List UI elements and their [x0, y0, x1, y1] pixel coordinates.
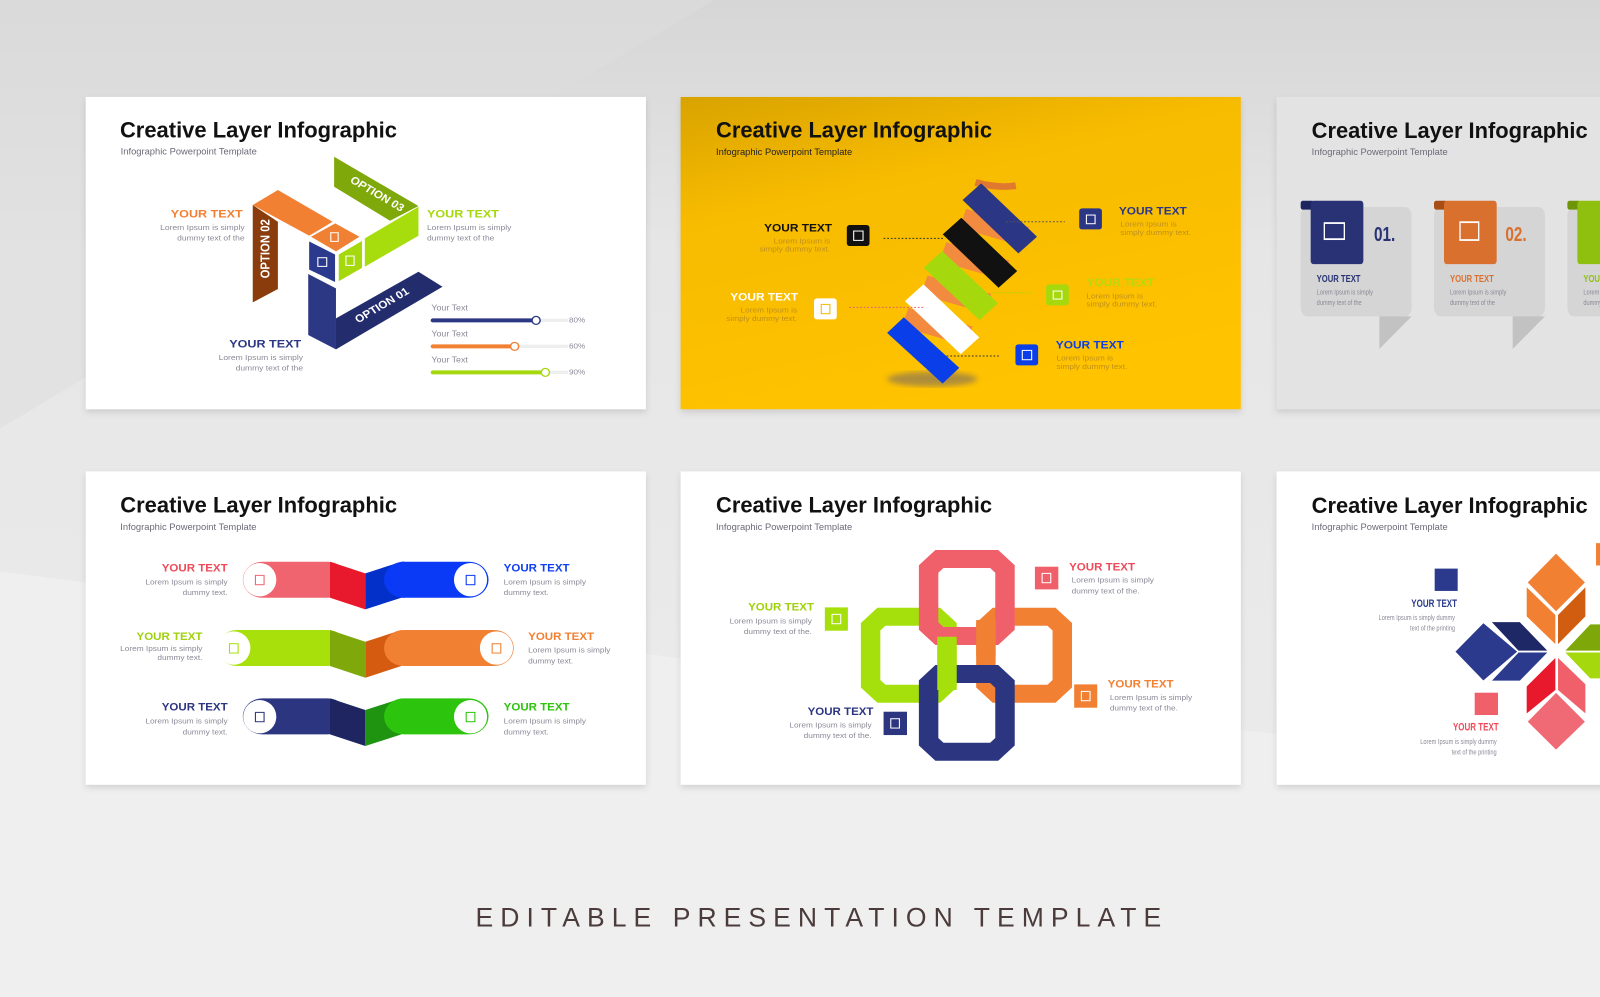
- card 4: folded ribbons: [86, 471, 646, 785]
- progress bars: [431, 303, 585, 377]
- callout 02: [1434, 201, 1545, 349]
- subtitle: Infographic Powerpoint Template: [121, 147, 257, 157]
- callout 02: YOUR TEXT: [1450, 273, 1494, 284]
- title: Creative Layer Infographic: [716, 117, 992, 142]
- subtitle card 3: Infographic Powerpoint Template: [1312, 147, 1448, 157]
- texts: YOUR TEXT: [137, 631, 203, 643]
- title card 3: Creative Layer Infographic: [1312, 119, 1588, 143]
- texts: dummy text.: [504, 588, 549, 597]
- card 2: yellow helix: [681, 97, 1241, 409]
- ribbon row 2: [217, 630, 514, 678]
- callout 01: Lorem Ipsum is simply: [1317, 289, 1374, 297]
- callout 01: [1301, 201, 1412, 349]
- chain rings: [871, 559, 1062, 752]
- texts: YOUR TEXT: [1086, 277, 1154, 289]
- progress bars: Your Text: [431, 355, 469, 365]
- texts: [726, 206, 1191, 371]
- texts: Lorem Ipsum is simply: [145, 578, 228, 586]
- cube flower: [1454, 543, 1600, 751]
- texts: simply dummy text.: [1120, 228, 1191, 237]
- texts: YOUR TEXT: [1108, 679, 1174, 690]
- texts: Lorem Ipsum is simply: [528, 646, 610, 655]
- texts: YOUR TEXT: [764, 223, 832, 235]
- text navy card 6: text of the printing: [1410, 625, 1455, 633]
- text navy card 6: [1379, 569, 1458, 633]
- texts: YOUR TEXT: [504, 702, 570, 714]
- navy column: [308, 274, 336, 349]
- title: Creative Layer Infographic: [120, 117, 397, 142]
- texts: [730, 562, 1192, 740]
- subtitle card 6: Infographic Powerpoint Template: [1312, 522, 1448, 532]
- texts: YOUR TEXT: [1119, 206, 1187, 217]
- olive option 03: [334, 157, 418, 221]
- subtitle: Infographic Powerpoint Template: [716, 522, 852, 532]
- callout 03 (cut): [1567, 201, 1600, 316]
- text: green: YOUR TEXT: [427, 207, 500, 220]
- option 02 column: [253, 205, 278, 302]
- callout 01: dummy text of the: [1317, 300, 1362, 307]
- text navy card 6: YOUR TEXT: [1411, 598, 1457, 610]
- texts: Lorem Ipsum is simply: [1110, 693, 1192, 702]
- texts: [120, 563, 610, 736]
- title card 6: Creative Layer Infographic: [1312, 494, 1588, 518]
- text: navy: dummy text of the: [236, 364, 304, 372]
- texts: dummy text.: [528, 657, 573, 665]
- texts: YOUR TEXT: [162, 563, 228, 575]
- texts: simply dummy text.: [1057, 362, 1127, 371]
- ribbon row 1: [243, 562, 489, 609]
- text: orange: [160, 207, 246, 242]
- texts: YOUR TEXT: [748, 602, 814, 614]
- texts: dummy text.: [157, 653, 202, 662]
- text pink card 6: text of the printing: [1452, 749, 1497, 757]
- icon squares: [825, 567, 1097, 735]
- text: navy: [219, 337, 304, 372]
- olive option 03: OPTION 03: [348, 175, 406, 214]
- texts: Lorem Ipsum is simply: [730, 617, 812, 625]
- progress bars: 60%: [569, 342, 585, 351]
- texts: dummy text.: [504, 728, 549, 736]
- footer caption: EDITABLE PRESENTATION TEMPLATE: [476, 903, 1167, 933]
- texts: dummy text.: [183, 728, 228, 736]
- callout 02: dummy text of the: [1450, 300, 1495, 307]
- cube: [308, 222, 363, 283]
- texts: YOUR TEXT: [162, 702, 228, 714]
- texts: simply dummy text.: [726, 314, 797, 323]
- texts: simply dummy text.: [1086, 300, 1157, 309]
- progress bars: Your Text: [431, 303, 469, 313]
- title: Creative Layer Infographic: [716, 493, 992, 518]
- option 01 slab: [336, 272, 443, 349]
- texts: dummy text of the.: [1110, 704, 1178, 713]
- option 02 column: OPTION 02: [258, 219, 273, 278]
- texts: Lorem Ipsum is: [1120, 220, 1177, 229]
- text pink card 6: YOUR TEXT: [1453, 722, 1499, 734]
- callout 02: 02.: [1505, 223, 1527, 245]
- texts: YOUR TEXT: [730, 292, 798, 304]
- text: green: dummy text of the: [427, 234, 495, 242]
- orange slab: [253, 190, 333, 236]
- texts: YOUR TEXT: [1056, 340, 1124, 351]
- card 3 and card 6: right column: [1277, 97, 1600, 785]
- dotted connectors: [849, 222, 1065, 356]
- title: Creative Layer Infographic: [120, 493, 397, 518]
- texts: YOUR TEXT: [1069, 562, 1135, 574]
- card 1: isometric options: [86, 97, 646, 409]
- cube icons: [318, 233, 354, 266]
- helix ribbon: [895, 182, 1028, 376]
- ribbon row 3: [243, 698, 489, 746]
- callout 02: Lorem Ipsum is simply: [1450, 289, 1507, 297]
- texts: dummy text of the.: [744, 627, 812, 636]
- texts: YOUR TEXT: [504, 563, 570, 575]
- progress bars: 80%: [569, 316, 585, 325]
- text pink card 6: [1420, 693, 1499, 757]
- texts: YOUR TEXT: [808, 706, 874, 718]
- texts: Lorem Ipsum is: [741, 306, 797, 315]
- callout 01: 01.: [1374, 223, 1395, 245]
- subtitle: Infographic Powerpoint Template: [716, 147, 852, 157]
- helix shadow: [887, 372, 977, 386]
- texts: simply dummy text.: [759, 245, 830, 254]
- card 5: chain links: [681, 471, 1241, 785]
- text pink card 6: Lorem Ipsum is simply dummy: [1420, 738, 1497, 746]
- texts: Lorem Ipsum is simply: [504, 578, 586, 586]
- progress bars: Your Text: [431, 329, 469, 339]
- callout 01: YOUR TEXT: [1317, 273, 1361, 284]
- texts: dummy text of the.: [1072, 587, 1140, 595]
- text navy card 6: Lorem Ipsum is simply dummy: [1379, 614, 1456, 622]
- texts: Lorem Ipsum is simply: [1072, 576, 1154, 585]
- text: navy: YOUR TEXT: [229, 337, 302, 350]
- texts: Lorem Ipsum is: [1057, 354, 1113, 363]
- subtitle: Infographic Powerpoint Template: [120, 522, 257, 532]
- texts: Lorem Ipsum is simply: [789, 721, 872, 729]
- texts: dummy text of the.: [804, 731, 872, 740]
- text: orange: dummy text of the: [177, 234, 245, 242]
- text: green: [427, 207, 512, 242]
- texts: Lorem Ipsum is: [1086, 292, 1143, 300]
- text: navy: Lorem Ipsum is simply: [219, 353, 304, 362]
- green slab: [365, 207, 418, 267]
- text: orange: YOUR TEXT: [171, 207, 243, 220]
- icon boxes: [814, 208, 1102, 365]
- option 01 slab: OPTION 01: [353, 286, 412, 326]
- text: orange: Lorem Ipsum is simply: [160, 223, 246, 232]
- texts: Lorem Ipsum is simply: [145, 717, 228, 726]
- texts: Lorem Ipsum is simply: [504, 717, 586, 726]
- texts: Lorem Ipsum is: [774, 237, 830, 245]
- texts: dummy text.: [183, 588, 228, 597]
- texts: YOUR TEXT: [528, 631, 594, 643]
- progress bars: 90%: [569, 368, 585, 377]
- text: green: Lorem Ipsum is simply: [427, 223, 512, 232]
- texts: Lorem Ipsum is simply: [120, 644, 202, 653]
